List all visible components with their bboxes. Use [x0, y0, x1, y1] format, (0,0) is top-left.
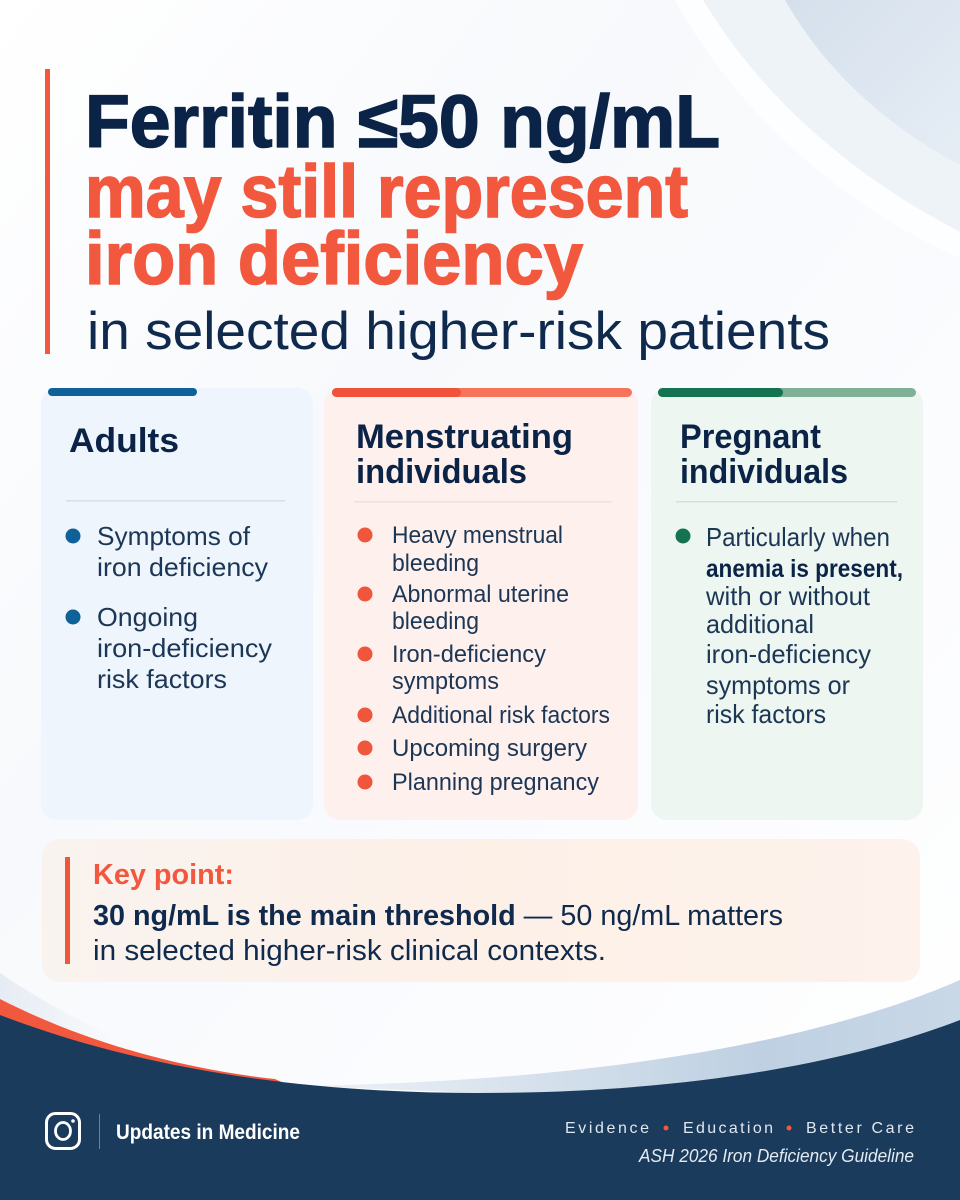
title: Ferritin ≤50 ng/mL [85, 80, 720, 163]
list: pregnant individuals: risk factors [706, 699, 826, 729]
list: menstruating individuals: bleeding [392, 608, 479, 635]
list: menstruating individuals: symptoms [392, 668, 499, 695]
list: adults: Ongoing [97, 602, 198, 632]
list: pregnant individuals: symptoms or [706, 670, 850, 700]
heading: adults: Adults [69, 422, 179, 460]
tagline: Evidence [565, 1120, 649, 1137]
list: menstruating individuals: bleeding [392, 550, 479, 577]
footer waves [0, 973, 960, 1200]
brand name: Updates in Medicine [116, 1121, 300, 1144]
list: menstruating individuals: Iron-deficiency [392, 641, 546, 668]
list: adults: risk factors [97, 664, 227, 694]
list: adults: iron-deficiency [97, 633, 272, 663]
list: adults [66, 521, 272, 694]
list: pregnant individuals [676, 522, 903, 729]
tagline: Better Care [806, 1120, 914, 1137]
icon: instagram [46, 1114, 80, 1148]
callout text: 30 ng/mL is the main threshold — 50 ng/mL matters [93, 900, 783, 932]
heading: pregnant individuals [680, 418, 848, 491]
list: menstruating individuals: Abnormal uterine [392, 581, 569, 608]
list: pregnant individuals: additional [706, 609, 814, 639]
title: may still represent [85, 150, 688, 233]
tagline [565, 1120, 914, 1137]
panel: pregnant individuals [651, 388, 923, 820]
heading: menstruating individuals [356, 418, 573, 491]
tagline: Education [683, 1120, 773, 1137]
list: menstruating individuals: Heavy menstrual [392, 522, 563, 549]
callout text [93, 900, 783, 967]
list: pregnant individuals: anemia is present, [706, 555, 903, 583]
list: pregnant individuals: iron-deficiency [706, 639, 871, 669]
callout text: in selected higher-risk clinical contexts. [93, 935, 606, 967]
source: ASH 2026 Iron Deficiency Guideline [638, 1146, 914, 1166]
list: menstruating individuals [358, 522, 610, 796]
list: menstruating individuals: Upcoming surgery [392, 735, 587, 762]
title: in selected higher-risk patients [87, 302, 830, 361]
panel: menstruating individuals [324, 388, 638, 820]
list: pregnant individuals: Particularly when [706, 522, 890, 552]
list: menstruating individuals: Additional risk factors [392, 702, 610, 729]
heading: pregnant individuals: individuals [680, 453, 848, 491]
list: adults: iron deficiency [97, 552, 268, 582]
heading: pregnant individuals: Pregnant [680, 418, 821, 456]
panel: adults [41, 388, 313, 820]
callout heading: Key point: [93, 859, 234, 891]
heading: menstruating individuals: Menstruating [356, 418, 573, 456]
heading: menstruating individuals: individuals [356, 453, 527, 491]
title: iron deficiency [85, 217, 583, 300]
callout: key point [42, 839, 920, 982]
title accent bar [45, 69, 50, 354]
title [85, 80, 830, 361]
list: adults: Symptoms of [97, 521, 251, 551]
top-right corner curves [675, 0, 960, 258]
list: pregnant individuals: with or without [705, 581, 871, 611]
list: menstruating individuals: Planning pregnancy [392, 769, 599, 796]
